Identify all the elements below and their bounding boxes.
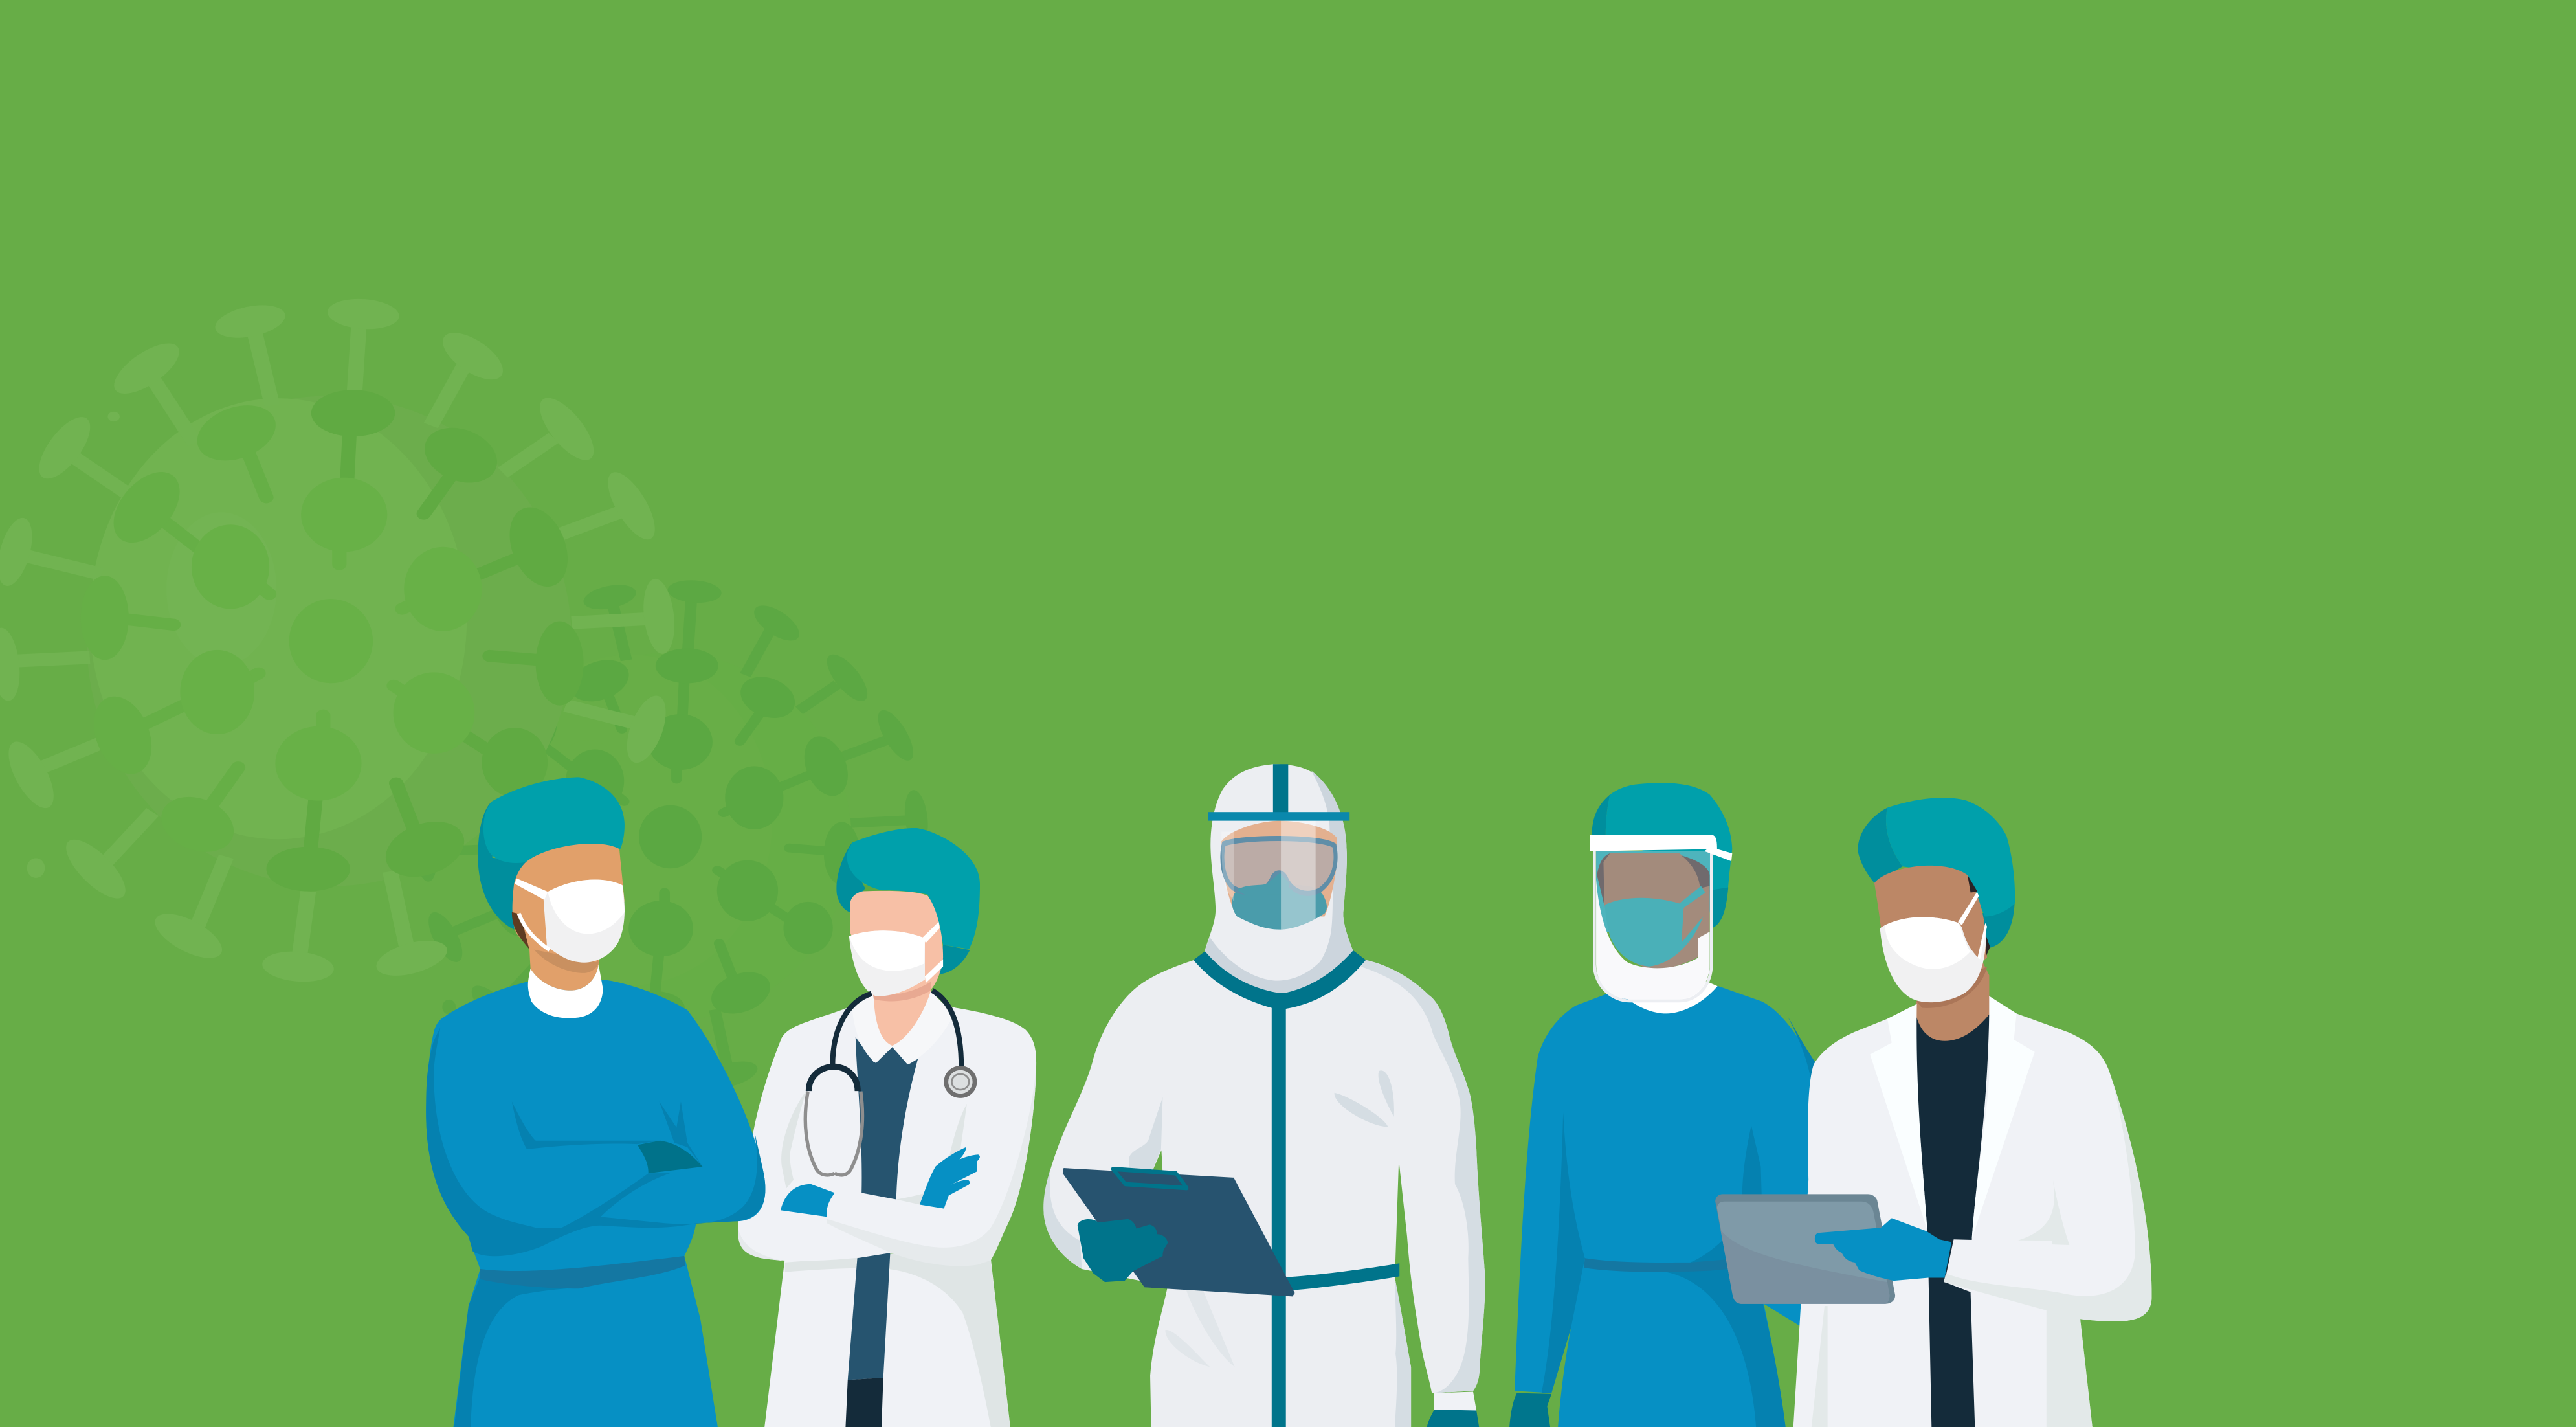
gown	[1515, 986, 1818, 1427]
hood stripe	[1273, 764, 1288, 813]
face	[513, 844, 625, 962]
cap	[847, 828, 980, 949]
hair	[1597, 853, 1709, 906]
neck	[874, 991, 931, 1046]
lapels	[1870, 996, 2035, 1239]
hood	[1205, 764, 1353, 994]
neck	[529, 945, 601, 991]
hair	[1968, 875, 1990, 957]
gown lower	[453, 1219, 718, 1427]
cap back	[836, 842, 865, 912]
gown shadows	[426, 1028, 765, 1256]
gown shadows	[1542, 1112, 1585, 1393]
virus: front left	[0, 297, 678, 985]
coat shadows	[827, 1062, 1036, 1266]
right glove	[920, 1147, 980, 1209]
collar	[528, 964, 603, 1018]
stethoscope	[805, 991, 975, 1175]
sleeve	[1944, 1239, 2052, 1310]
goggles	[1222, 838, 1336, 893]
gown upper	[426, 980, 765, 1269]
hidden hand	[638, 1141, 702, 1173]
suit shadows	[1361, 960, 1485, 1393]
glove	[1078, 1219, 1168, 1282]
belt	[480, 1256, 685, 1288]
figure: surgeon in blue gown	[426, 777, 765, 1427]
sleeve shadow	[1944, 1075, 2151, 1427]
suit creases	[1335, 1070, 1394, 1127]
figure: doctor holding tablet	[1715, 798, 2151, 1427]
figure: nurse with face shield	[1509, 783, 1818, 1427]
belt	[1584, 1258, 1727, 1272]
cap	[483, 777, 625, 863]
shield band	[1590, 835, 1717, 851]
left glove	[781, 1184, 835, 1217]
face shield highlights	[1281, 821, 1316, 930]
glove	[1509, 1393, 1551, 1427]
shield rim	[1594, 851, 1711, 1001]
trousers	[845, 1378, 883, 1427]
shield tint	[1596, 851, 1709, 932]
neck band	[1194, 950, 1366, 1009]
shield lower	[1596, 879, 1709, 999]
mask	[1880, 892, 1987, 1002]
coat shading	[1812, 1306, 1828, 1427]
respirator	[1232, 873, 1327, 930]
suit body	[1043, 960, 1485, 1427]
cap back	[478, 801, 527, 930]
coat lower	[764, 1258, 1010, 1427]
neck	[1916, 962, 1989, 1041]
cuff	[1434, 1392, 1476, 1410]
cap	[1858, 807, 1902, 883]
coat upper	[738, 991, 1036, 1261]
face	[1597, 853, 1709, 969]
hair	[512, 912, 529, 949]
shirt	[856, 1037, 918, 1199]
clipboard	[1063, 1168, 1295, 1296]
visor band	[1208, 812, 1349, 821]
virus illustration: background pair	[0, 297, 931, 1094]
mask	[849, 922, 943, 996]
collar	[1625, 982, 1718, 1013]
mask	[1604, 886, 1705, 967]
figure: doctor with stethoscope	[738, 828, 1036, 1427]
mask	[515, 878, 625, 963]
sleeve creases	[512, 1101, 702, 1167]
shield strap	[1704, 847, 1732, 861]
collar	[852, 991, 954, 1064]
glove	[1815, 1218, 1951, 1281]
face	[1221, 821, 1337, 917]
shirt	[1916, 1015, 1989, 1427]
coat	[1793, 996, 2151, 1427]
zipper	[1272, 1007, 1286, 1427]
face	[850, 891, 943, 995]
belt	[1285, 1263, 1399, 1291]
face	[1874, 866, 1987, 1002]
right glove	[1427, 1410, 1479, 1427]
tablet	[1715, 1194, 1895, 1304]
cap	[1592, 794, 1610, 836]
figure: worker in protective suit	[1043, 764, 1485, 1427]
virus: rear right	[412, 578, 931, 1094]
